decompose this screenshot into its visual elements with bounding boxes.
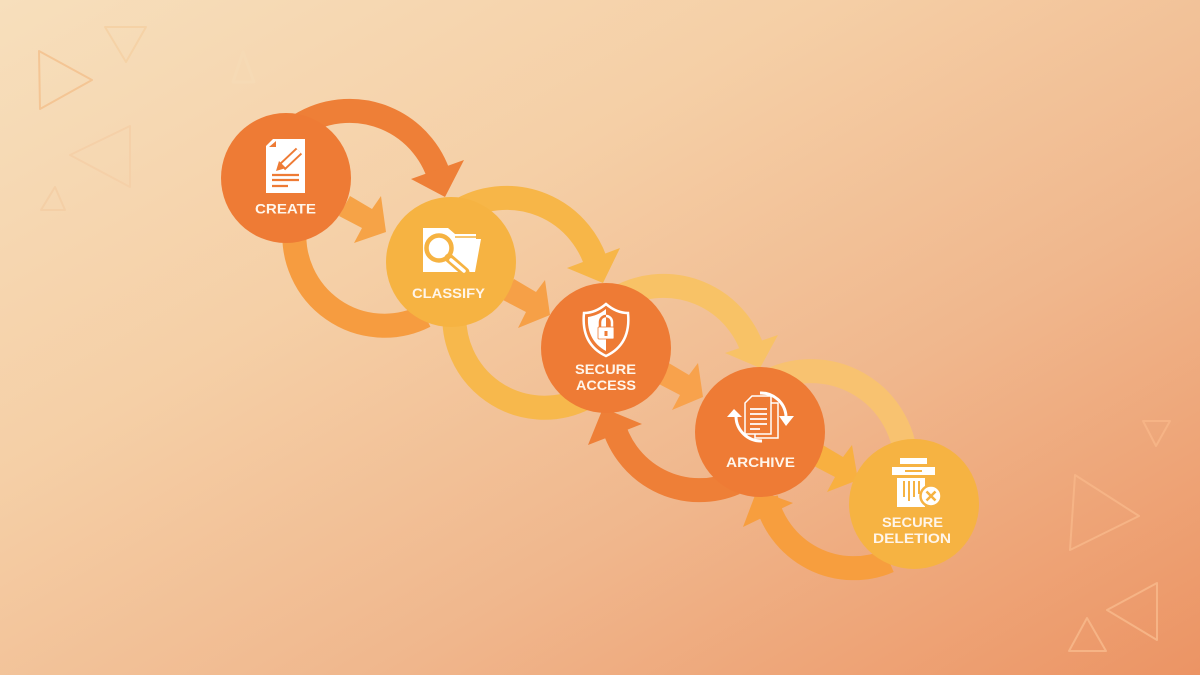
- arrow: archive back to secure access: [588, 408, 735, 490]
- label: secure access: SECURE: [575, 361, 636, 377]
- icon: document with pencil: [266, 139, 305, 193]
- label: archive: ARCHIVE: [726, 454, 795, 470]
- arrow: archive to secure deletion, upper arc: [760, 371, 906, 470]
- arrow: create to classify, lower arc: [294, 225, 425, 326]
- arrow: short archive to secure deletion: [812, 444, 858, 492]
- background triangles: bottom right: [1069, 421, 1170, 651]
- icon: trash bin with x: [892, 458, 942, 507]
- label: secure deletion: [873, 514, 951, 546]
- label: secure access: [575, 361, 636, 393]
- step: create: [221, 113, 351, 243]
- icon: folder with magnifier: [423, 228, 481, 272]
- arrow: secure deletion back to archive: [743, 490, 889, 568]
- arrow: secure access to archive, upper arc: [614, 286, 778, 368]
- label: secure access: ACCESS: [576, 377, 636, 393]
- step: archive: [695, 367, 825, 497]
- arrow: short classify to secure access: [503, 279, 550, 328]
- label: classify: CLASSIFY: [412, 285, 486, 301]
- arrow: short secure access to archive: [657, 362, 703, 410]
- arrow: classify to secure access, lower arc: [454, 307, 585, 408]
- arrow: classify to secure access, upper arc: [457, 198, 620, 283]
- step: secure access: [541, 283, 671, 413]
- arrow: create to classify, upper arc: [300, 111, 464, 197]
- step: secure deletion: [849, 439, 979, 569]
- label: secure deletion: DELETION: [873, 530, 951, 546]
- background triangles: top left: [39, 27, 254, 210]
- arrow: short create to classify: [339, 196, 386, 243]
- icon: shield with padlock: [584, 304, 628, 356]
- icon: document with cycle arrows: [727, 393, 794, 441]
- step: classify: [386, 197, 516, 327]
- label: secure deletion: SECURE: [882, 514, 943, 530]
- label: create: CREATE: [255, 200, 316, 216]
